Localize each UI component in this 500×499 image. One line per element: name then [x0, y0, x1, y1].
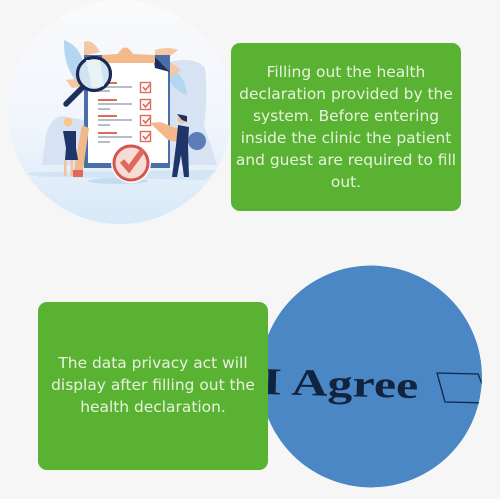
- text box: health declaration: and guest are required to fill: [236, 151, 456, 169]
- check badge: [111, 143, 151, 183]
- text box: data privacy act: display after filling out the: [51, 376, 255, 394]
- magnifying glass: [66, 58, 110, 104]
- ground shadow: [88, 178, 148, 184]
- illustration: health declaration checklist: [8, 0, 232, 224]
- peach shapes: [66, 41, 100, 88]
- backdrop blob left: [42, 116, 84, 165]
- row 2: [98, 99, 150, 110]
- clipboard: [84, 55, 170, 168]
- photo: I Agree: [260, 266, 490, 488]
- text box: data privacy act: The data privacy act will: [58, 354, 248, 372]
- checkbox: [437, 373, 490, 403]
- text box: health declaration: out.: [331, 173, 361, 191]
- row 4: [98, 132, 150, 143]
- woman with pencil: [63, 118, 89, 177]
- text box: health declaration: Filling out the health: [267, 63, 425, 81]
- leaf right: [166, 68, 187, 95]
- text box: health declaration: inside the clinic the patient: [241, 129, 451, 147]
- circle background: [8, 0, 232, 224]
- backdrop blob right: [170, 60, 217, 165]
- row 3: [98, 115, 150, 126]
- I Agree text: I Agree: [262, 361, 419, 407]
- ground: [28, 170, 217, 180]
- text box: health declaration: [231, 43, 461, 211]
- text box: health declaration: system. Before entering: [253, 107, 439, 125]
- photo background: [260, 266, 482, 488]
- text box: data privacy act: [38, 302, 268, 470]
- leaf left: [64, 40, 84, 86]
- row 1: [98, 82, 150, 92]
- clip: [102, 48, 155, 63]
- text box: health declaration: declaration provided by the: [239, 85, 453, 103]
- text box: data privacy act: health declaration.: [80, 398, 226, 416]
- man with pencil: [150, 114, 206, 177]
- check list rows: [98, 82, 150, 143]
